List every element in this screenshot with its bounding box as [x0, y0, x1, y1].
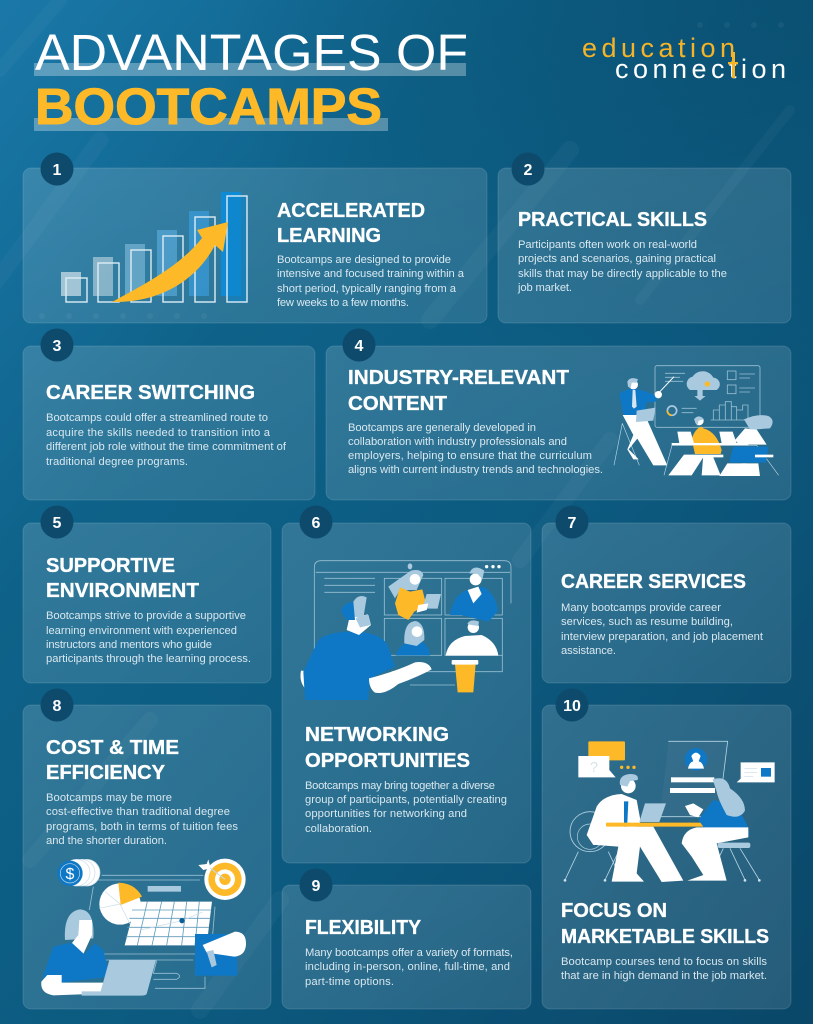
number badge 7: 7	[568, 515, 577, 532]
body text	[305, 780, 507, 835]
panel: 7 career services	[542, 523, 791, 683]
body text	[561, 956, 767, 982]
panel: 2 practical skills	[498, 168, 791, 323]
heading	[305, 724, 470, 772]
heading	[46, 555, 199, 602]
body text: aligns with current industry trends and technologies.	[348, 464, 603, 476]
panel: 4 industry-relevant content	[326, 346, 791, 500]
body text: instructors and mentors who guide	[46, 639, 212, 651]
body text: opportunities for networking and	[305, 808, 467, 820]
body text: that are in high demand in the job market.	[561, 970, 767, 982]
body text: services, such as resume building,	[561, 616, 733, 628]
heading: EFFICIENCY	[46, 762, 166, 784]
number badge 8	[40, 688, 74, 722]
number badge 2: 2	[524, 162, 533, 179]
heading: OPPORTUNITIES	[305, 750, 470, 772]
body text: Many bootcamps offer a variety of formats,	[305, 947, 513, 959]
panel: 9 flexibility	[282, 885, 531, 1009]
illustration: job interview: ?	[590, 760, 598, 776]
number badge 10: 10	[563, 698, 581, 715]
body text	[348, 422, 603, 476]
panel: 8 cost and time efficiency	[23, 705, 271, 1009]
body text	[46, 792, 238, 847]
heading: CAREER SERVICES	[561, 571, 746, 593]
body text: Many bootcamps provide career	[561, 602, 721, 614]
heading: ACCELERATED	[277, 200, 425, 222]
heading: MARKETABLE SKILLS	[561, 926, 769, 948]
body text: participants through the learning process.	[46, 653, 251, 665]
heading	[348, 367, 569, 415]
number badge 10	[556, 688, 588, 722]
body text: intensive and focused training within a	[277, 268, 465, 280]
illustration: video call	[300, 561, 511, 700]
body text: collaboration.	[305, 823, 372, 835]
body text: job market.	[517, 282, 572, 294]
number badge 1: 1	[53, 162, 62, 179]
title	[34, 24, 468, 135]
heading: CAREER SWITCHING	[46, 382, 255, 404]
number badge 5: 5	[53, 515, 62, 532]
body text: Bootcamps are generally developed in	[348, 422, 536, 434]
number badge 9: 9	[312, 878, 321, 895]
illustration: budget dashboard	[41, 859, 246, 996]
number badge 4: 4	[355, 338, 364, 355]
body text: group of participants, potentially creating	[305, 794, 507, 806]
body text: projects and scenarios, gaining practical	[518, 253, 716, 265]
body text: short period, typically ranging from a	[277, 283, 457, 295]
number badge 3: 3	[53, 338, 62, 355]
title underline 2	[34, 118, 388, 131]
logo: education connection: education	[582, 33, 735, 63]
number badge 5	[40, 506, 74, 538]
body text: including in-person, online, full-time, and	[305, 961, 510, 973]
body text: Bootcamps may bring together a diverse	[305, 780, 495, 792]
title underline 1	[34, 63, 466, 76]
body text: interview preparation, and job placement	[561, 631, 764, 643]
body text: collaboration with industry professionals and	[348, 436, 567, 448]
number badge 3	[40, 328, 74, 362]
body text: acquire the skills needed to transition into a	[46, 427, 271, 439]
number badge 8: 8	[53, 698, 62, 715]
heading: ENVIRONMENT	[46, 580, 199, 602]
heading	[46, 737, 179, 784]
body text	[561, 602, 764, 657]
number badge 1	[40, 152, 74, 186]
panel: 5 supportive environment	[23, 523, 271, 683]
illustration: job interview	[564, 741, 775, 882]
heading: SUPPORTIVE	[46, 555, 175, 577]
body text: Bootcamps strive to provide a supportive	[46, 610, 246, 622]
number badge 6: 6	[312, 515, 321, 532]
heading: NETWORKING	[305, 724, 449, 746]
body text	[277, 254, 465, 309]
heading	[277, 200, 425, 247]
body text: employers, helping to ensure that the curriculum	[348, 450, 592, 462]
body text	[305, 947, 513, 988]
body text: assistance.	[561, 645, 616, 657]
number badge 4	[342, 328, 376, 362]
number badge 9	[300, 868, 332, 902]
heading: FLEXIBILITY	[305, 917, 422, 939]
body text: part-time options.	[305, 976, 394, 988]
body text: traditional degree programs.	[46, 456, 188, 468]
panel: 6 networking opportunities	[282, 523, 531, 863]
number badge 2	[512, 152, 544, 186]
heading: COST & TIME	[46, 737, 179, 759]
body text: Bootcamps are designed to provide	[277, 254, 451, 266]
number badge 6	[300, 506, 332, 538]
body text: and the shorter duration.	[46, 835, 167, 847]
heading: PRACTICAL SKILLS	[518, 209, 707, 231]
logo: education connection: connection	[615, 54, 786, 84]
logo: education connection	[582, 33, 786, 84]
heading: FOCUS ON	[561, 900, 667, 922]
panel: 10 focus on marketable skills	[542, 705, 791, 1009]
body text	[517, 239, 727, 294]
panel: 3 career switching	[23, 346, 315, 500]
body text: cost-effective than traditional degree	[46, 806, 230, 818]
body text: Bootcamp courses tend to focus on skills	[561, 956, 767, 968]
body text: Bootcamps may be more	[46, 792, 172, 804]
body text: skills that may be directly applicable to the	[518, 268, 727, 280]
body text: different job role without the time commitment of	[46, 441, 287, 453]
title line 2: BOOTCAMPS	[35, 78, 382, 135]
heading: LEARNING	[277, 225, 381, 247]
body text: Bootcamps could offer a streamlined route to	[46, 412, 268, 424]
heading	[561, 900, 769, 948]
panel: 1 accelerated learning	[23, 168, 487, 323]
body text: Participants often work on real-world	[518, 239, 697, 251]
heading: CONTENT	[348, 393, 447, 415]
body text: learning environment with experienced	[46, 625, 237, 637]
number badge 7	[556, 506, 588, 538]
body text: few weeks to a few months.	[277, 297, 409, 309]
bar chart with arrow	[61, 192, 247, 302]
body text	[46, 412, 287, 468]
title line 1: ADVANTAGES OF	[35, 24, 468, 81]
illustration: presenter and team at a board	[614, 366, 779, 476]
heading: INDUSTRY-RELEVANT	[348, 367, 569, 389]
body text: programs, both in terms of tuition fees	[46, 821, 238, 833]
illustration: budget dashboard: $	[66, 866, 75, 883]
body text	[46, 610, 251, 665]
